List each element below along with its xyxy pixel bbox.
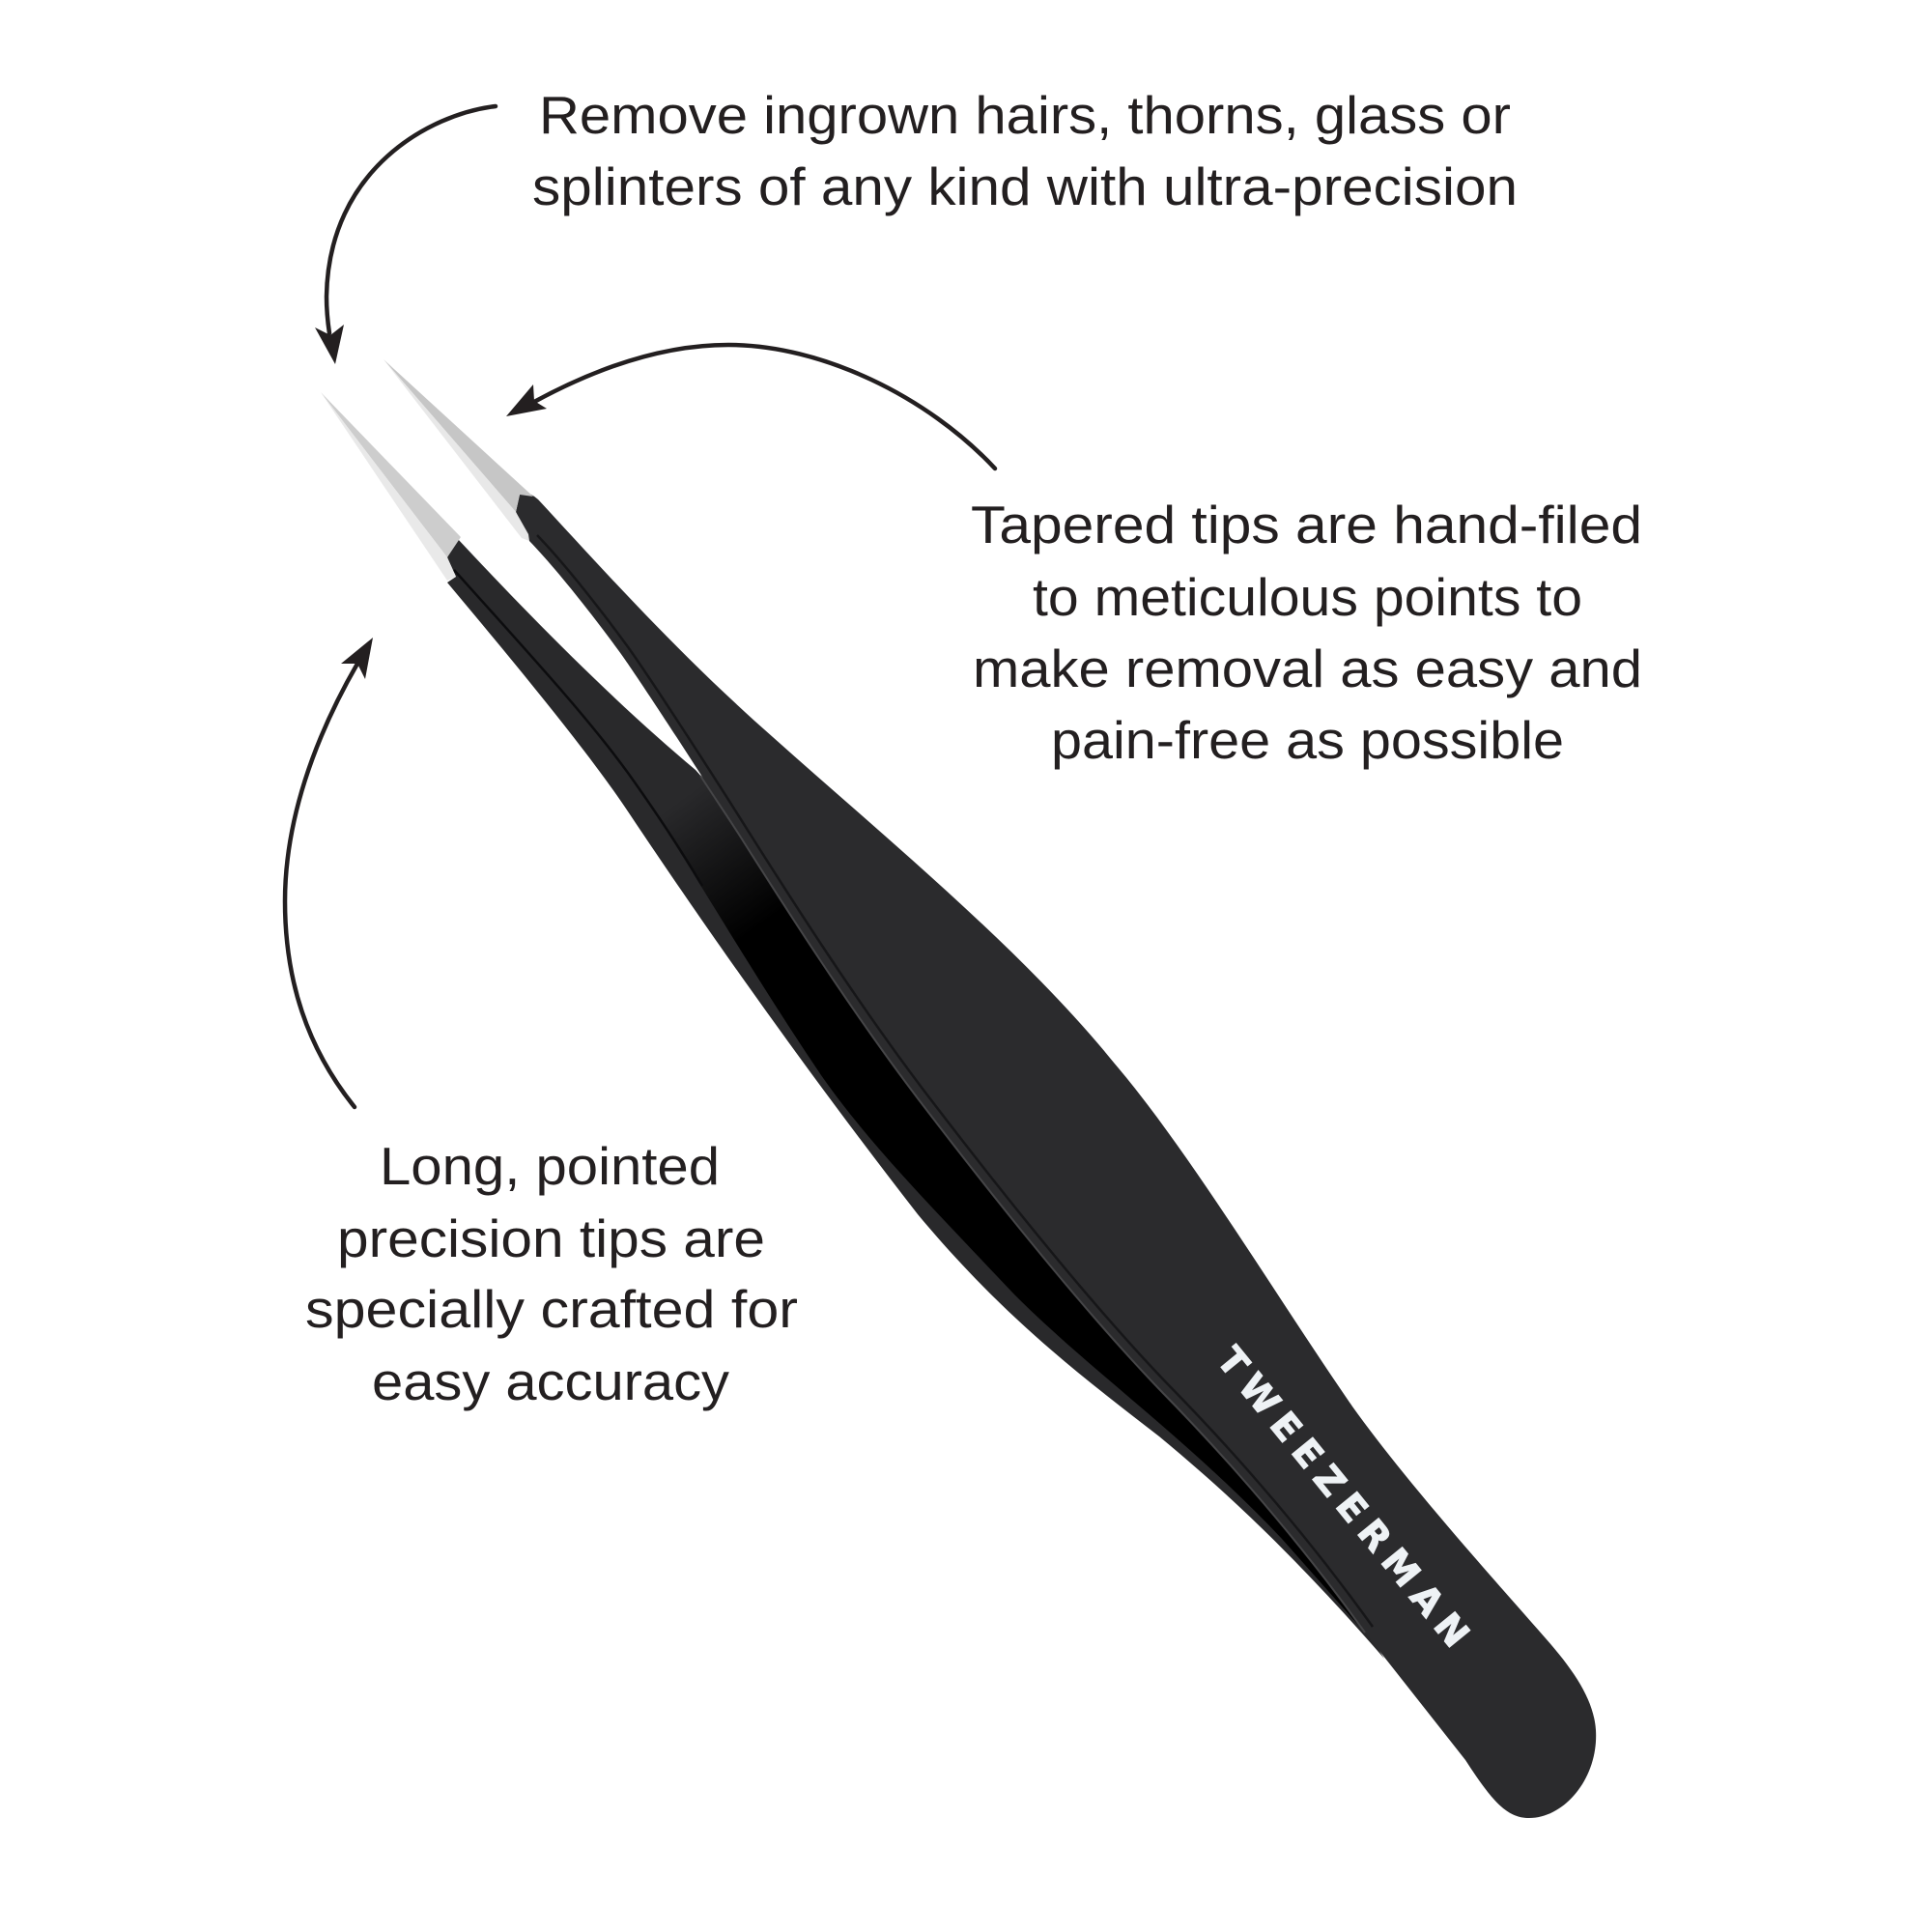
inner shadow of back arm: [464, 577, 1365, 1633]
callout text: tapered tips: pain-free as possible: [1051, 710, 1564, 770]
callout text: tapered tips: Tapered tips are hand-filed: [971, 495, 1642, 554]
arrow: top callout to tips: [315, 106, 496, 364]
silver tip: right: [384, 359, 533, 541]
callout text: tapered tips: to meticulous points to: [1033, 567, 1582, 627]
callout text: long pointed tips: easy accuracy: [372, 1351, 730, 1411]
front arm bevel line: [537, 535, 1373, 1627]
back arm: [447, 538, 1384, 1659]
callout text: remove ingrown hairs: Remove ingrown hairs, thorns, glass or: [539, 85, 1511, 145]
arrow: left callout to tips: [285, 638, 373, 1107]
callout text: long pointed tips: Long, pointed: [380, 1136, 720, 1196]
callout text: long pointed tips: specially crafted for: [305, 1279, 798, 1339]
callout text: long pointed tips: precision tips are: [337, 1208, 765, 1268]
back arm ridge line: [454, 570, 702, 886]
callout text: long pointed tips: [305, 1136, 798, 1411]
callout text: remove ingrown hairs: splinters of any kind with ultra-precision: [532, 156, 1518, 216]
arrow: right callout to tips: [506, 345, 995, 469]
callout text: tapered tips: [971, 495, 1642, 770]
front arm ridge highlight: [700, 776, 1365, 1633]
silver tip: left: [321, 392, 461, 581]
callout text: remove ingrown hairs: [532, 85, 1518, 216]
tweezers: [321, 359, 1596, 1818]
brand name: TWEEZERMAN: [1208, 1339, 1478, 1656]
callout text: tapered tips: make removal as easy and: [973, 639, 1642, 698]
front arm: [516, 493, 1596, 1818]
